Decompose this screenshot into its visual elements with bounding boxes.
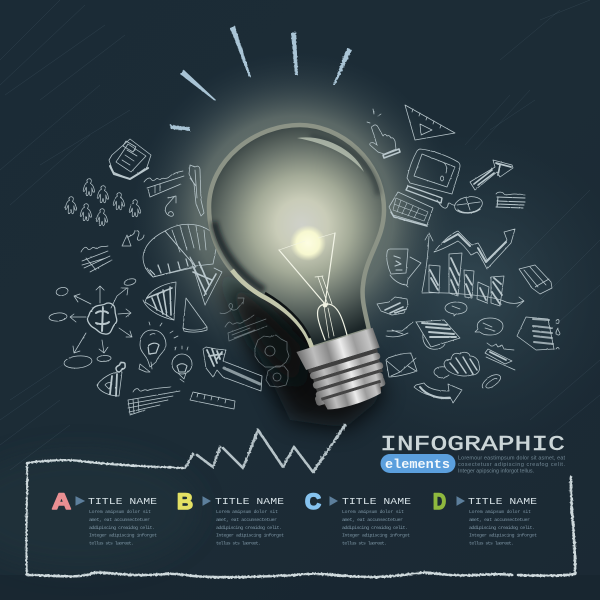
body text bbox=[342, 509, 410, 546]
icon: letter B: B bbox=[177, 489, 193, 514]
body text: Lorem amipsum dolor sit bbox=[469, 509, 531, 515]
icon: pointing hand bbox=[367, 109, 400, 158]
screw base bbox=[296, 327, 393, 416]
column C bbox=[305, 489, 411, 546]
icon: pin loop bbox=[122, 231, 144, 246]
body text: Lorem amipsum dolor sit bbox=[89, 509, 151, 515]
body text: tellus sts laoreet. bbox=[216, 540, 261, 546]
body text: amet, eat accunsectetuer bbox=[342, 517, 403, 523]
body text: addipiscing creaidog celit. bbox=[469, 525, 535, 531]
icon: scribble list bbox=[81, 246, 112, 272]
icon: envelope bbox=[386, 353, 417, 377]
icon: letter C: C bbox=[305, 489, 321, 514]
body text: Lorem amipsum dolor sit bbox=[216, 509, 278, 515]
title: INFOGRAPHIC: INFOGRAPHIC bbox=[380, 434, 565, 457]
icon: paper clip bbox=[482, 375, 501, 388]
body text bbox=[216, 509, 284, 546]
icon: pen bbox=[189, 165, 204, 216]
body text bbox=[469, 509, 537, 546]
icon: torn arrow bbox=[377, 297, 408, 315]
column D bbox=[433, 489, 537, 546]
icon: loop arrow bbox=[165, 196, 176, 216]
icon: gears bbox=[255, 335, 289, 387]
icon: signature scribble bbox=[220, 298, 267, 341]
icon: cone bbox=[183, 298, 207, 332]
heading: TITLE NAME bbox=[88, 496, 157, 507]
icon: bar chart with trend arrow bbox=[422, 229, 524, 307]
body text: tellus sts laoreet. bbox=[89, 540, 134, 546]
icon: scribble bars bbox=[128, 387, 180, 415]
heading: TITLE NAME bbox=[468, 496, 537, 507]
intro text: cosectetusr adipiscing creafog celit. bbox=[458, 462, 565, 468]
icon: outline arrow bbox=[414, 383, 462, 403]
intro text: Integer apipscing inforgot tellus. bbox=[458, 468, 534, 474]
glass highlight bbox=[297, 137, 364, 172]
icon: cloud bbox=[434, 352, 480, 378]
icon: letter A: A bbox=[52, 489, 71, 514]
icon: big light bulb bbox=[139, 322, 178, 372]
icon: fat arrow bbox=[203, 347, 262, 391]
column B bbox=[177, 489, 284, 546]
icon: eraser bbox=[519, 265, 552, 294]
filament wires bbox=[279, 233, 347, 340]
icon: pie chart bbox=[143, 224, 222, 305]
body text: tellus sts laoreet. bbox=[342, 540, 387, 546]
arrow marker bbox=[330, 497, 337, 505]
elements badge bbox=[380, 454, 456, 473]
inner rim shading bbox=[214, 222, 264, 290]
icon: fruit sketch bbox=[97, 362, 125, 396]
icon: ruler bbox=[190, 392, 235, 409]
body text: addipiscing creaidog celit. bbox=[89, 525, 155, 531]
body text: amet, eat accunsectetuer bbox=[216, 517, 277, 523]
doodles right side bbox=[367, 105, 560, 403]
body text: Lorem amipsum dolor sit bbox=[342, 509, 404, 515]
body text: Integer adipiscing inforgot bbox=[469, 532, 537, 538]
icon: people group bbox=[65, 179, 141, 226]
filament glow bbox=[290, 225, 326, 261]
heading: TITLE NAME bbox=[215, 496, 284, 507]
icon: computer mouse bbox=[453, 195, 484, 215]
body text: Integer adipiscing inforgot bbox=[216, 532, 284, 538]
doodles left side bbox=[49, 139, 289, 415]
chalk frame with zig-zag trend line bbox=[26, 425, 575, 577]
body text: amet, eat accunsectetuer bbox=[89, 517, 150, 523]
icon: clipboard bbox=[109, 139, 151, 179]
light bulb bbox=[209, 125, 393, 416]
body text: tellus sts laoreet. bbox=[469, 540, 514, 546]
icon: letter D: D bbox=[433, 489, 446, 514]
icon: scribble stack bbox=[496, 192, 525, 208]
body text: addipiscing creaidog celit. bbox=[342, 525, 408, 531]
elements badge: elements bbox=[385, 457, 450, 472]
icon: keyboard bbox=[389, 192, 433, 226]
icon: speech bubble small bbox=[445, 302, 467, 316]
arrow marker bbox=[457, 497, 464, 505]
column A bbox=[52, 489, 157, 546]
icon: notepad bbox=[416, 320, 460, 349]
bulb glass bbox=[209, 125, 384, 348]
icon: document bbox=[387, 249, 421, 287]
arrow marker bbox=[203, 497, 210, 505]
body text: amet, eat accunsectetuer bbox=[469, 517, 530, 523]
icon: money diagram bbox=[49, 278, 137, 369]
icon: computer monitor bbox=[406, 149, 460, 208]
icon: scribble notes bbox=[144, 171, 184, 197]
icon: notebook bbox=[517, 317, 560, 350]
icon: curved arrow bbox=[470, 160, 513, 190]
icon: speech bubble large bbox=[475, 318, 503, 335]
icon: pen scribble bbox=[485, 343, 515, 370]
intro text: Loremour eastimpsum dolor sit asmet, eat bbox=[458, 456, 566, 462]
icon: quick scribble bbox=[386, 322, 413, 337]
arrow marker bbox=[76, 497, 84, 505]
heading: TITLE NAME bbox=[342, 496, 411, 507]
bulb shadow bbox=[215, 262, 385, 428]
icon: pie slice bbox=[143, 282, 176, 320]
light rays bbox=[170, 26, 352, 131]
body text: addipiscing creaidog celit. bbox=[216, 525, 282, 531]
intro text bbox=[458, 456, 566, 474]
body text: Integer adipiscing inforgot bbox=[89, 532, 157, 538]
icon: small light bulb bbox=[172, 346, 192, 382]
body text bbox=[89, 509, 157, 546]
body text: Integer adipiscing inforgot bbox=[342, 532, 410, 538]
icon: set square bbox=[405, 105, 455, 140]
